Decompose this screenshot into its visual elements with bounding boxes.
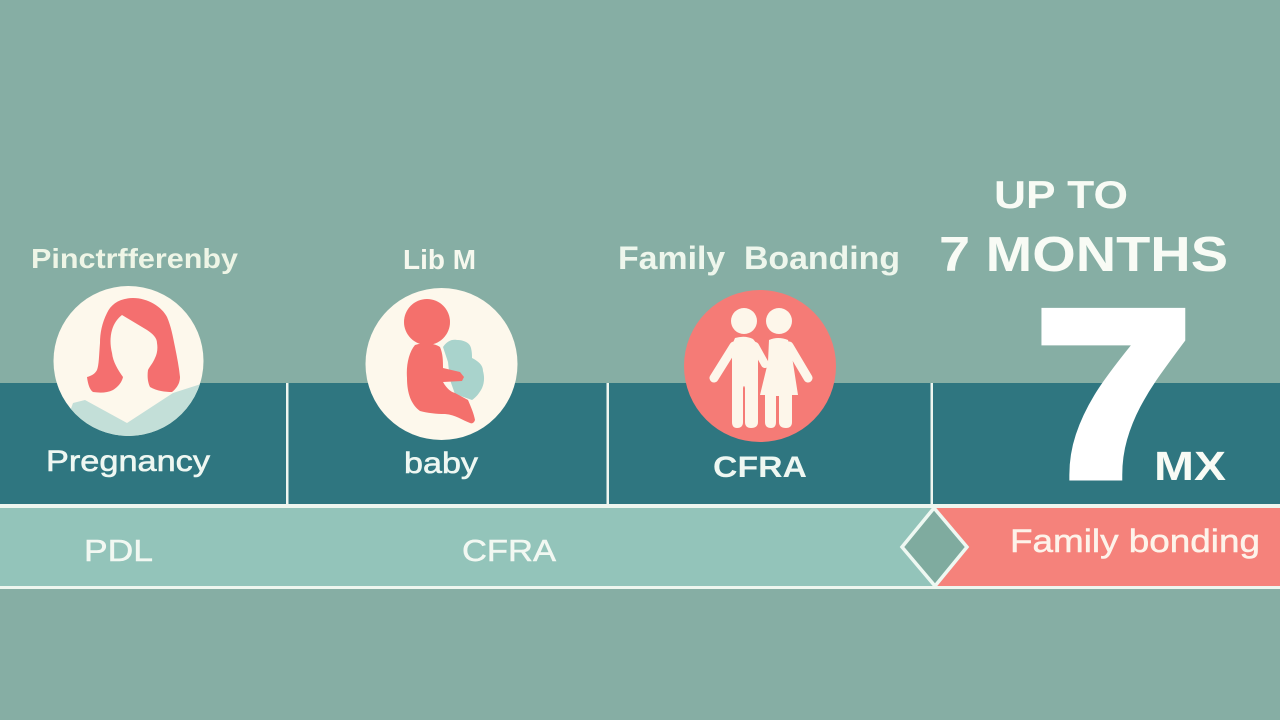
man — [732, 337, 758, 428]
icon: baby silhouette — [366, 288, 518, 440]
unit label: MX — [1154, 443, 1226, 489]
leave duration bar — [0, 504, 1280, 589]
callout line: up to: UP TO — [994, 174, 1128, 217]
callout line: 7 months: 7 MONTHS — [939, 228, 1228, 282]
label: CFRA column: CFRA — [713, 451, 807, 484]
bar label: PDL: PDL — [84, 533, 153, 568]
icon: couple — [684, 290, 836, 442]
label: pregnancy: Pregnancy — [46, 445, 210, 478]
family bonding segment — [934, 508, 1280, 586]
big number 7: 7 — [1036, 262, 1191, 525]
heading: pregnancy column: Pinctrfferenby — [31, 243, 238, 274]
woman — [760, 338, 798, 428]
bar label: CFRA: CFRA — [462, 533, 556, 568]
small teal figure — [443, 340, 484, 400]
label: baby: baby — [404, 447, 478, 480]
diamond marker — [902, 508, 967, 586]
dark timeline band — [0, 383, 1280, 505]
heading: baby column: Lib M — [403, 244, 476, 275]
heading: family bonding column: Family Boanding — [618, 240, 900, 276]
bar label: family bonding: Family bonding — [1010, 523, 1260, 559]
callout: up to 7 months — [939, 174, 1228, 525]
coral baby — [404, 299, 475, 423]
icon: woman silhouette — [54, 286, 204, 440]
